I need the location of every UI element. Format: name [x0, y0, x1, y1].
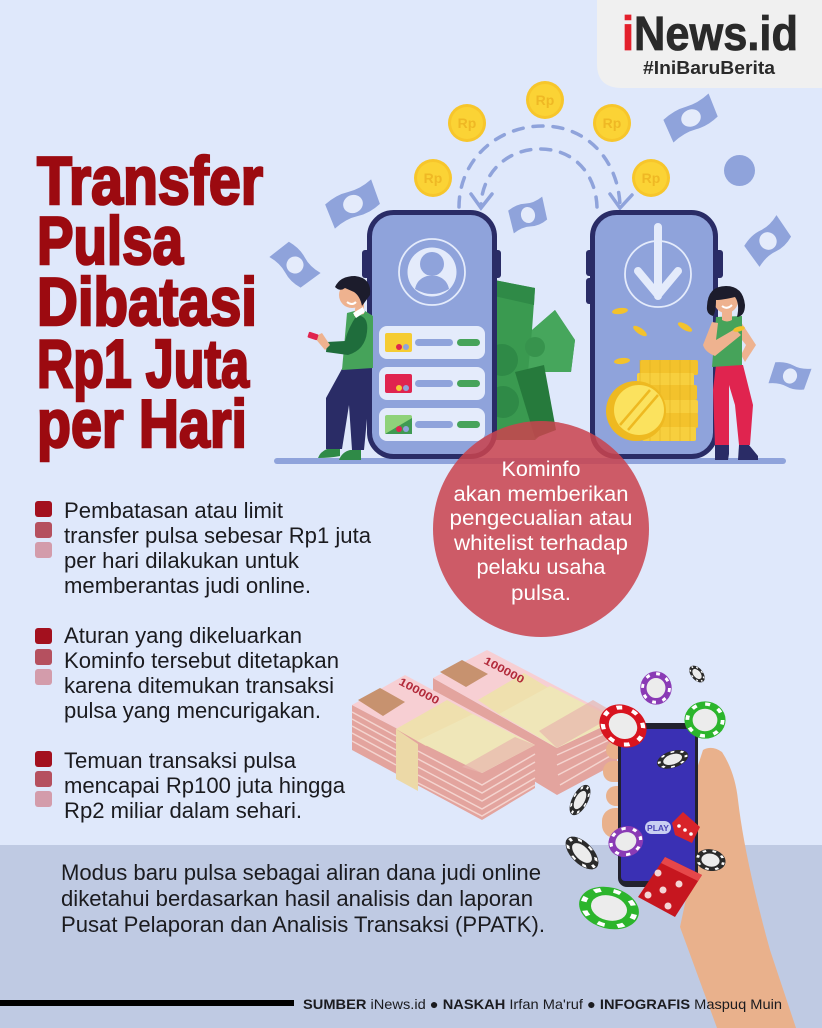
- coin stack: [606, 360, 698, 441]
- bottom summary text: diketahui berdasarkan hasil analisis dan laporan: [61, 886, 533, 911]
- man with phone: [307, 276, 373, 460]
- floating banknotes: [269, 94, 812, 395]
- title: per Hari: [37, 386, 247, 462]
- title: Pulsa: [37, 203, 184, 279]
- bottom band: [0, 845, 822, 1028]
- bullet list 1: transfer pulsa sebesar Rp1 juta: [64, 523, 372, 548]
- left phone: [362, 212, 501, 456]
- green money bundle: [486, 280, 575, 440]
- card row: green: [379, 408, 485, 441]
- bottom summary text: Pusat Pelaporan dan Analisis Transaksi (PPATK).: [61, 912, 545, 937]
- play button: PLAY: [647, 823, 669, 833]
- bullet list 3: [35, 748, 346, 823]
- title: Transfer: [37, 143, 263, 219]
- banknote stack: back: 100000: [482, 655, 526, 686]
- fingers: [602, 741, 636, 838]
- bottom summary text: [61, 860, 545, 937]
- logo: iNews.id: #IniBaruBerita: [643, 58, 776, 78]
- footer bar: [0, 1000, 294, 1006]
- red callout circle: pengecualian atau: [450, 507, 632, 530]
- bullet list 1: [35, 498, 372, 598]
- bottom summary text: Modus baru pulsa sebagai aliran dana judi online: [61, 860, 541, 885]
- falling coins: [612, 307, 693, 365]
- dashed transfer arrows: [459, 126, 632, 208]
- card row: yellow: [379, 326, 485, 359]
- icon: download arrow: [625, 227, 691, 307]
- red callout circle: pelaku usaha: [476, 556, 606, 579]
- red callout circle: pulsa.: [511, 582, 571, 605]
- hand holding phone: [602, 723, 796, 1028]
- bullet list 1: per hari dilakukan untuk: [64, 548, 299, 573]
- icon: user profile: [399, 239, 465, 305]
- play button: [645, 821, 671, 834]
- bullet list 2: [35, 623, 339, 723]
- bullet list 1: memberantas judi online.: [64, 573, 311, 598]
- card row: red: [379, 367, 485, 400]
- red dice: [638, 812, 702, 917]
- banknote stack: front: 100000: [397, 676, 441, 707]
- bullet list 2: Aturan yang dikeluarkan: [64, 623, 302, 648]
- banknote stack: front: [352, 675, 535, 820]
- title: Rp1 Juta: [37, 326, 250, 402]
- bullet list 3: mencapai Rp100 juta hingga: [64, 773, 346, 798]
- footer credits: SUMBER iNews.id ● NASKAH Irfan Ma'ruf ● INFOGRAFIS Maspuq Muin: [303, 996, 782, 1012]
- title: Dibatasi: [37, 264, 257, 340]
- logo: iNews.id: [597, 0, 822, 88]
- small die: [672, 812, 700, 843]
- woman with coins: [703, 286, 758, 460]
- logo: iNews.id: iNews.id: [622, 8, 798, 61]
- bullet list 2: karena ditemukan transaksi: [64, 673, 334, 698]
- right phone: [586, 212, 723, 456]
- bullet list 3: Temuan transaksi pulsa: [64, 748, 297, 773]
- bullet list 2: Kominfo tersebut ditetapkan: [64, 648, 339, 673]
- red callout circle: whitelist terhadap: [453, 532, 628, 555]
- red callout circle: [433, 421, 649, 637]
- ground line: [274, 458, 786, 464]
- large die: [638, 857, 702, 917]
- banknote stack: back: [433, 650, 617, 795]
- red callout circle: Kominfo: [502, 458, 580, 481]
- bullet list 1: Pembatasan atau limit: [64, 498, 283, 523]
- bullet list 2: pulsa yang mencurigakan.: [64, 698, 321, 723]
- casino chips: [560, 663, 727, 935]
- bullet list 3: Rp2 miliar dalam sehari.: [64, 798, 302, 823]
- red callout circle: akan memberikan: [454, 483, 628, 506]
- forearm and hand: [680, 748, 796, 1028]
- smartphone: [618, 723, 698, 887]
- coins: [414, 81, 670, 197]
- title: [37, 143, 263, 462]
